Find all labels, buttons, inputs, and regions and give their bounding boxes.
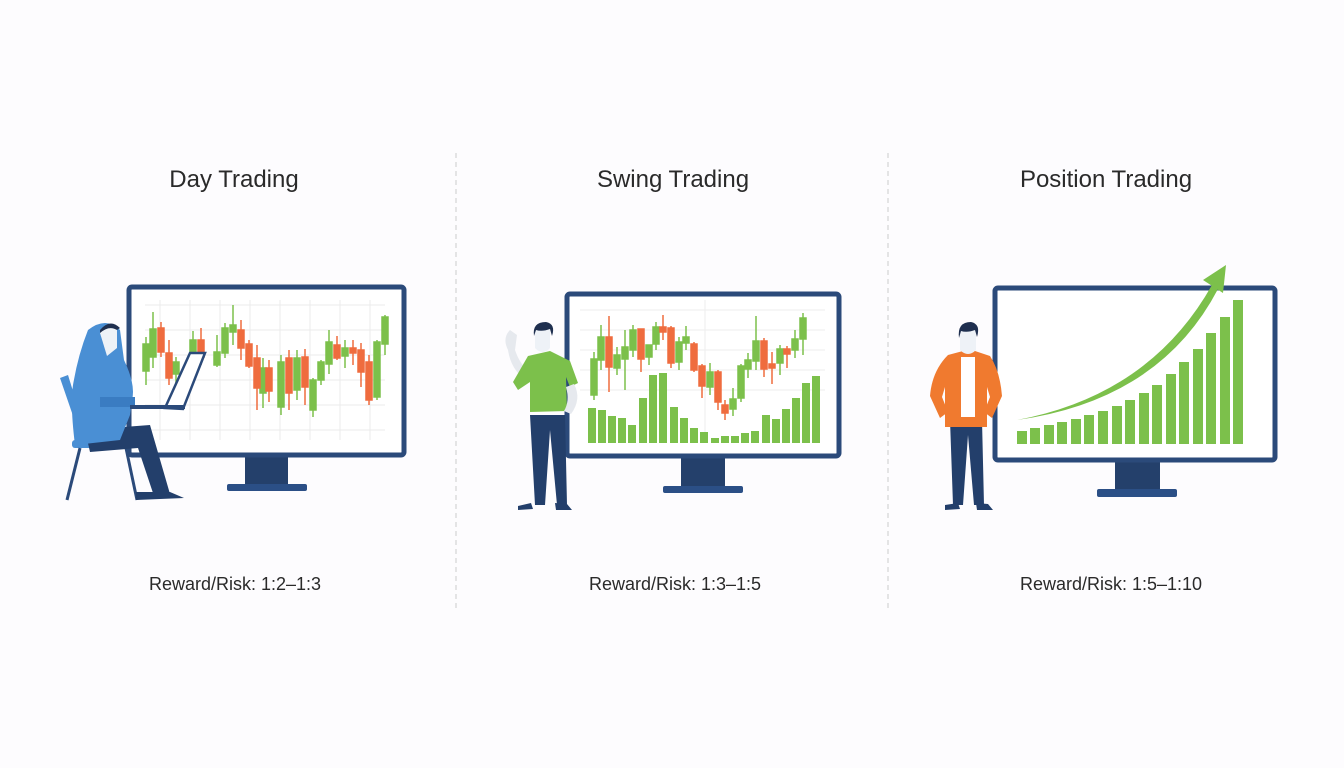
volume bars 2 bbox=[588, 373, 820, 443]
illustration: swing trading bbox=[505, 294, 839, 510]
label: swing reward/risk: Reward/Risk: 1:3–1:5 bbox=[589, 574, 761, 594]
person: standing, green shirt bbox=[505, 322, 578, 510]
monitor 3 bbox=[995, 288, 1275, 497]
label: day reward/risk: Reward/Risk: 1:2–1:3 bbox=[149, 574, 321, 594]
illustration: day trading bbox=[60, 287, 404, 500]
person: seated with laptop bbox=[60, 323, 205, 500]
title: Position Trading: Position Trading bbox=[1020, 166, 1192, 193]
monitor 2 bbox=[567, 294, 839, 493]
arrow: growth trend bbox=[1017, 265, 1226, 420]
illustration: position trading bbox=[930, 265, 1275, 510]
candlestick chart 1 bbox=[143, 305, 388, 417]
growth bars 3 bbox=[1017, 300, 1243, 444]
title: Swing Trading: Swing Trading bbox=[597, 166, 749, 193]
person: standing, orange jacket bbox=[930, 322, 1002, 510]
monitor 1 bbox=[129, 287, 404, 491]
label: position reward/risk: Reward/Risk: 1:5–1:10 bbox=[1020, 574, 1202, 594]
title: Day Trading: Day Trading bbox=[169, 166, 299, 193]
candlestick chart 2 bbox=[591, 313, 806, 420]
